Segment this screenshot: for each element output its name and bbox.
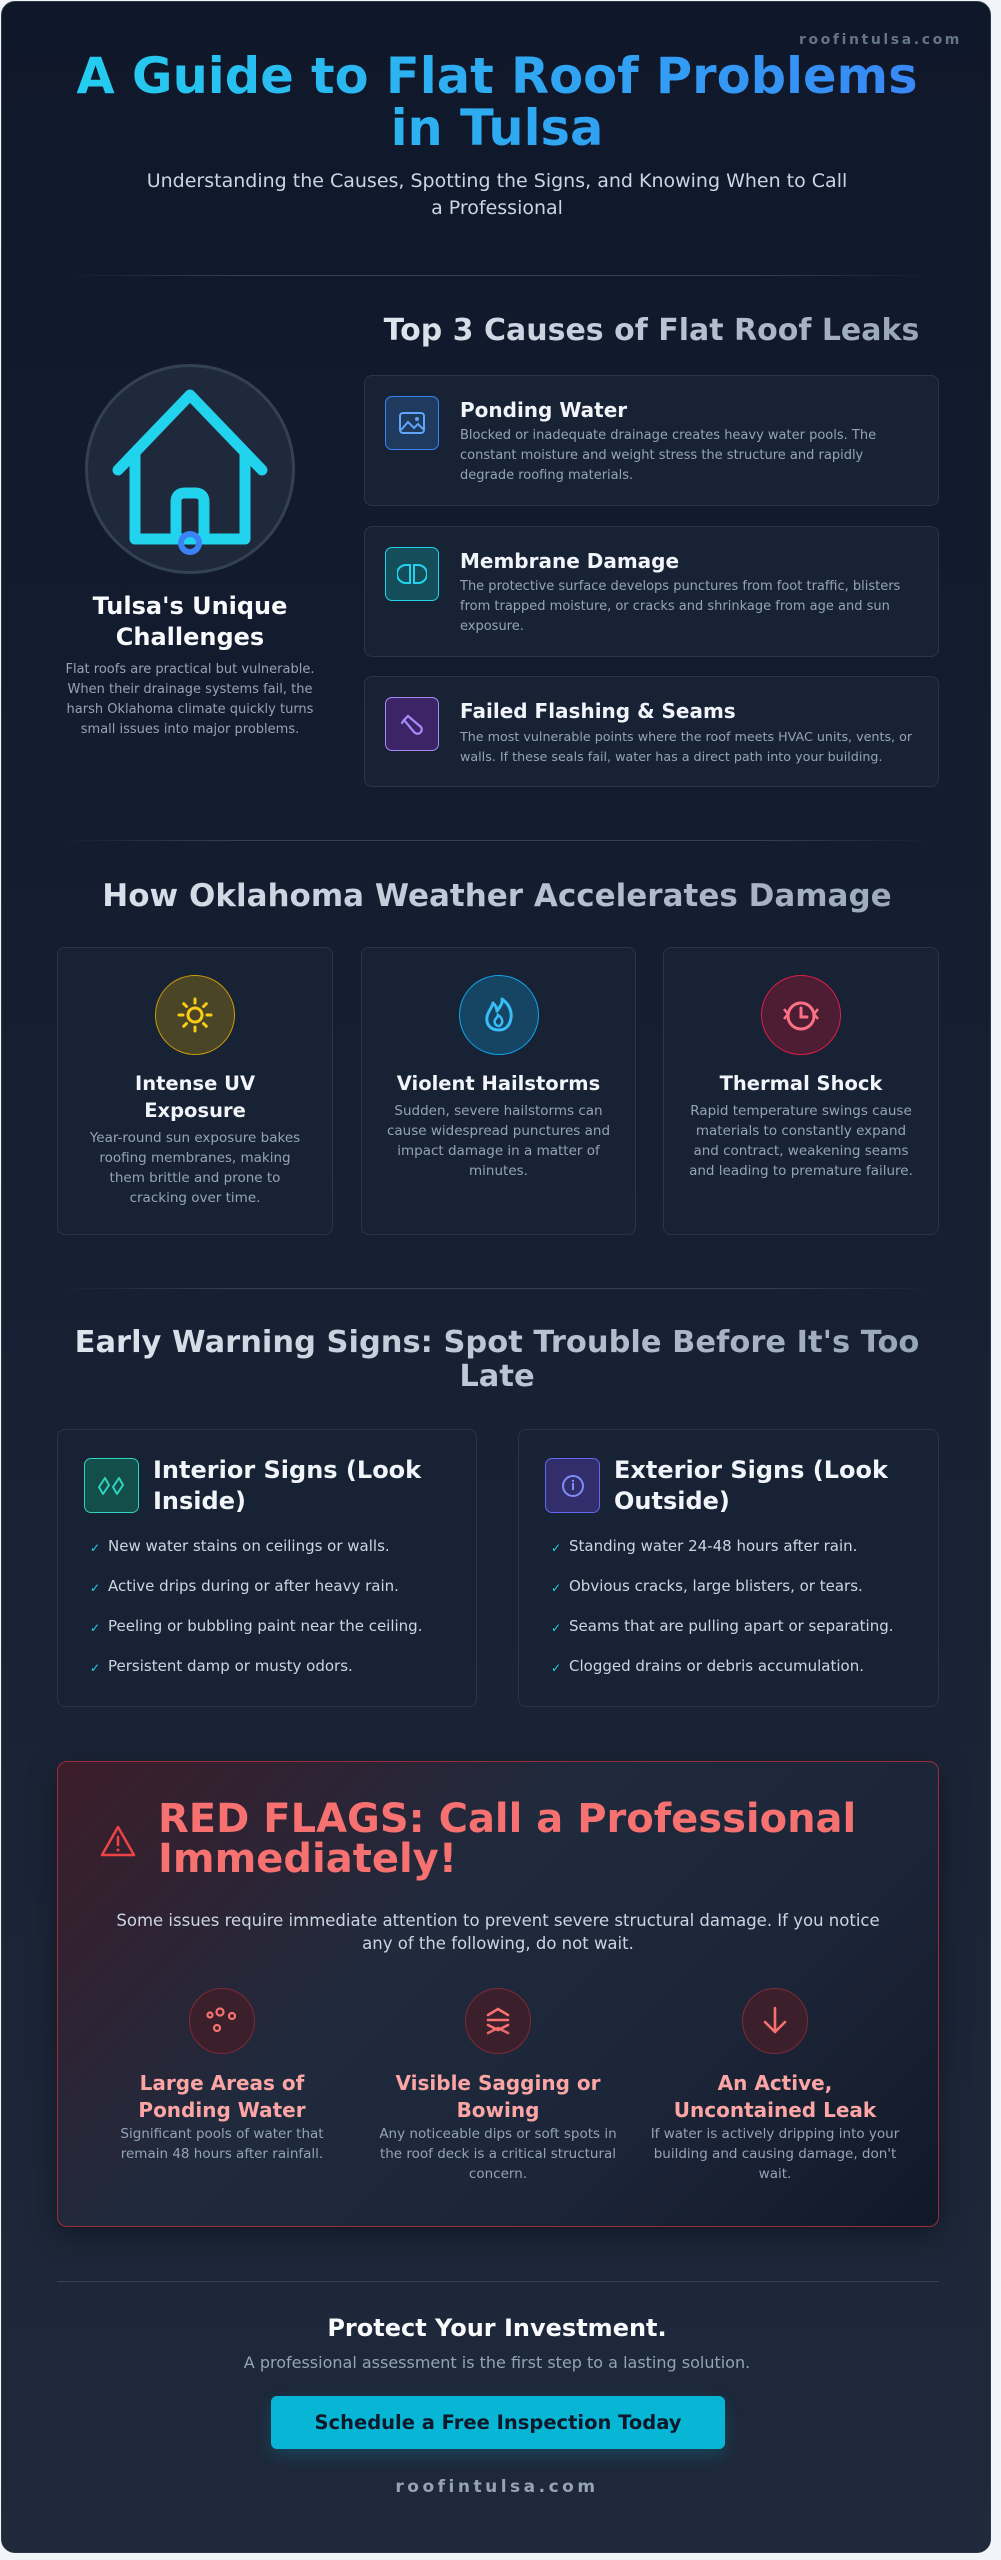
list: Standing water 24-48 hours after rain. <box>569 1537 857 1555</box>
red flag: leak <box>651 1988 900 2182</box>
panel: exterior signs <box>518 1429 939 1707</box>
title: Failed Flashing & Seams <box>460 699 736 723</box>
panel: cause ponding water <box>364 375 939 506</box>
title: RED FLAGS: Call a Professional Immediately! <box>158 1796 856 1882</box>
panel: cause failed flashing <box>364 676 939 787</box>
heading: Tulsa's Unique Challenges: Tulsa's Unique Challenges <box>93 592 287 651</box>
panel: interior signs: Peeling or bubbling paint near the ceiling. <box>108 1617 422 1635</box>
description: Sudden, severe hailstorms can cause widespread punctures and impact damage in a matter of minutes. <box>387 1103 610 1179</box>
description: Year-round sun exposure bakes roofing membranes, making them brittle and prone to cracking over time. <box>90 1130 300 1206</box>
panel: exterior signs: Obvious cracks, large blisters, or tears. <box>569 1577 863 1595</box>
title: Membrane Damage <box>460 549 679 573</box>
title: in Tulsa <box>391 99 603 157</box>
subtitle: Understanding the Causes, Spotting the Signs, and Knowing When to Call a Professional <box>147 170 847 219</box>
red flag: ponding: Significant pools of water that remain 48 hours after rainfall. <box>120 2126 324 2162</box>
footer site tag: roofintulsa.com <box>395 2477 599 2497</box>
icon: info <box>545 1458 600 1513</box>
icon: bandage <box>385 697 439 751</box>
icon: drops <box>84 1458 139 1513</box>
icon: membrane <box>385 547 439 601</box>
panel: exterior signs: ✓ <box>551 1541 561 1555</box>
text: challenges description: Flat roofs are practical but vulnerable. When their drainage systems fail, the harsh Oklahoma climate quickly turns small issues into major problems. <box>66 662 314 737</box>
title: Intense UV Exposure <box>135 1072 255 1122</box>
description: The most vulnerable points where the roof meets HVAC units, vents, or walls. If these seals fail, water has a direct path into your building. <box>460 729 912 764</box>
list: New water stains on ceilings or walls. <box>108 1537 390 1555</box>
red flag: leak: If water is actively dripping into your building and causing damage, don't wait. <box>651 2126 899 2182</box>
icon: arrow down <box>742 1988 808 2054</box>
panel: hailstorms <box>361 947 636 1235</box>
red flag: sagging: Any noticeable dips or soft spots in the roof deck is a critical structural concern. <box>379 2126 617 2182</box>
icon: house <box>85 364 295 574</box>
title <box>2 50 992 154</box>
panel: interior signs: ✓ <box>90 1621 100 1635</box>
red flag: leak: An Active, Uncontained Leak <box>674 2071 876 2122</box>
panel: cause membrane damage <box>364 526 939 657</box>
panel: Tulsa's unique challenges <box>66 364 314 737</box>
title: Violent Hailstorms <box>397 1072 600 1095</box>
panel: interior signs: Persistent damp or musty odors. <box>108 1657 353 1675</box>
intro text: Some issues require immediate attention to prevent severe structural damage. If you notice any of the following, do not wait. <box>116 1911 880 1953</box>
description: Blocked or inadequate drainage creates heavy water pools. The constant moisture and weight stress the structure and rapidly degrade roofing materials. <box>460 428 876 483</box>
icon: sun <box>155 975 235 1055</box>
heading: weather: How Oklahoma Weather Accelerates Damage <box>102 878 892 914</box>
panel: exterior signs: ✓ <box>551 1661 561 1675</box>
title: Thermal Shock <box>720 1072 882 1095</box>
title: A Guide to Flat Roof Problems <box>76 47 918 105</box>
red flag: sagging <box>379 1988 617 2182</box>
red flag: sagging: Visible Sagging or Bowing <box>396 2071 600 2122</box>
panel: exterior signs: ✓ <box>551 1581 561 1595</box>
icon: image <box>385 396 439 450</box>
panel: interior signs: Active drips during or after heavy rain. <box>108 1577 399 1595</box>
title: Interior Signs (Look Inside) <box>153 1456 421 1515</box>
panel: exterior signs: ✓ <box>551 1621 561 1635</box>
CTA heading: Protect Your Investment. <box>327 2314 667 2342</box>
panel: interior signs: ✓ <box>90 1661 100 1675</box>
icon: bubbles <box>189 1988 255 2054</box>
panel: interior signs <box>57 1429 477 1707</box>
icon: warning <box>100 1826 136 1856</box>
site tag top: roofintulsa.com <box>799 32 962 48</box>
description: The protective surface develops punctures from foot traffic, blisters from trapped moisture, or cracks and shrinkage from age and sun exposure. <box>460 579 900 634</box>
panel: exterior signs: Seams that are pulling apart or separating. <box>569 1617 894 1635</box>
panel: interior signs: ✓ <box>90 1541 100 1555</box>
title: Ponding Water <box>460 398 627 422</box>
red flag: ponding: Large Areas of Ponding Water <box>138 2071 306 2122</box>
icon: sag <box>465 1988 531 2054</box>
panel: exterior signs: Clogged drains or debris accumulation. <box>569 1657 864 1675</box>
panel: UV exposure <box>57 947 333 1235</box>
CTA button: Schedule a Free Inspection Today <box>314 2411 682 2434</box>
panel: red flags <box>57 1761 939 2227</box>
title: Exterior Signs (Look Outside) <box>614 1456 888 1515</box>
heading: Top 3 Causes: Top 3 Causes of Flat Roof Leaks <box>384 313 919 348</box>
icon: clock <box>761 975 841 1055</box>
panel: thermal shock <box>663 947 939 1235</box>
panel: interior signs: ✓ <box>90 1581 100 1595</box>
heading: early warning signs: Early Warning Signs: Spot Trouble Before It's Too Late <box>75 1325 919 1394</box>
description: Rapid temperature swings cause materials to constantly expand and contract, weakening seams and leading to premature failure. <box>689 1103 913 1179</box>
red flag: ponding <box>120 1988 324 2162</box>
CTA button <box>271 2396 725 2449</box>
icon: flame <box>458 975 538 1055</box>
CTA text: A professional assessment is the first step to a lasting solution. <box>244 2353 750 2372</box>
